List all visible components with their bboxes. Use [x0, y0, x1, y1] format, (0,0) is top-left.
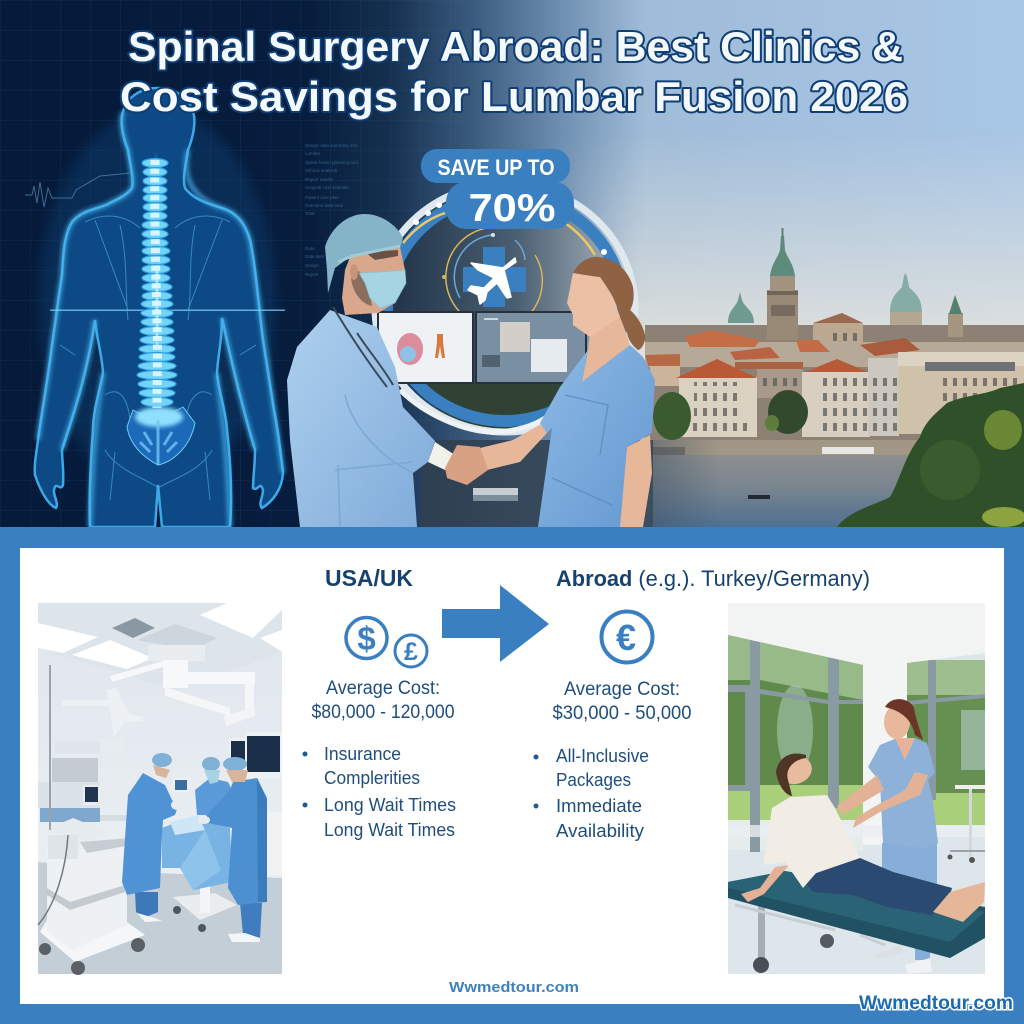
face and neck [342, 247, 405, 315]
usa bullet list: Insurance [324, 744, 401, 764]
abroad bullet list: Packages [556, 770, 631, 790]
handshake [445, 445, 488, 485]
technical data text: Data item [305, 254, 325, 259]
usa bullet list: Complerities [324, 768, 420, 788]
blue x-ray body [35, 88, 285, 527]
windows right [907, 660, 985, 825]
technical data text: Lumbar [305, 151, 321, 156]
surgeon [287, 214, 455, 527]
face [567, 273, 620, 337]
building 1 [676, 359, 757, 437]
usa cost: Average Cost: [326, 678, 440, 699]
neck [582, 315, 630, 382]
scrub top [538, 345, 655, 527]
technical data text: Design data summary info [305, 143, 358, 148]
technical data text: Clinical analysis [305, 168, 338, 173]
technical data text: Patient care plan [305, 195, 339, 200]
tour boat [473, 488, 518, 501]
cuff [428, 442, 455, 470]
column [863, 645, 907, 845]
technical data text: Total [305, 211, 315, 216]
glow line [50, 310, 285, 311]
embankment [653, 440, 923, 459]
clock tower [767, 228, 798, 340]
abroad cost: Average Cost: [564, 679, 680, 700]
gown [287, 310, 435, 527]
ring lower highlight [400, 390, 545, 432]
panel footer logo: Wwmedtour.com [449, 979, 579, 996]
vent [112, 618, 155, 638]
patient [741, 752, 985, 922]
ceiling [728, 603, 985, 665]
left equipment [38, 665, 130, 830]
tree foreground [837, 383, 1024, 527]
circular savings ring [375, 184, 635, 432]
stethoscope [333, 307, 393, 387]
icon: euro coin [602, 612, 652, 662]
hero background [0, 0, 1024, 527]
surgeon left [122, 753, 183, 922]
therapist [837, 699, 938, 848]
church front [813, 313, 863, 345]
technical data text: Report [305, 272, 319, 277]
hair [573, 257, 645, 350]
technical data text: Spinal fusion planning and [305, 160, 358, 165]
right arm [618, 435, 652, 527]
right dome [890, 273, 963, 337]
usa cost [312, 678, 454, 723]
abroad bullet list: All-Inclusive [556, 746, 649, 766]
waterfront trees [653, 390, 808, 440]
building 2 [802, 359, 870, 437]
building 3 [868, 358, 899, 436]
stand cart [948, 785, 985, 863]
operating room photo [38, 603, 282, 975]
rehabilitation room photo [728, 603, 985, 974]
save up to badge: 70% [468, 187, 556, 230]
icon: euro coin: € [616, 617, 636, 658]
surgical mask [359, 270, 406, 308]
surgeon middle [195, 757, 237, 820]
usa bullet list: Long Wait Times [324, 795, 456, 815]
plane and cross emblem [442, 228, 542, 320]
river [420, 440, 1024, 527]
icon: dollar coin: $ [357, 620, 376, 657]
icon: pound coin [395, 635, 427, 667]
window frames left [728, 640, 863, 852]
left dome [728, 292, 754, 323]
shoulder blades and bones [60, 216, 256, 500]
usa bullet list [302, 744, 456, 840]
save up to badge [421, 149, 574, 230]
ceiling mount and arms [55, 624, 255, 755]
surgeon right [198, 757, 267, 942]
abroad cost [552, 679, 692, 724]
monitors [378, 312, 586, 383]
column heading: USA/UK: USA/UK [325, 565, 413, 591]
nurse [480, 257, 655, 527]
small monitor and right monitors [173, 732, 282, 875]
city skyline [645, 228, 1024, 459]
therapist legs [873, 843, 937, 974]
sacrum [127, 407, 195, 465]
wall and ceiling [38, 603, 282, 974]
treatment table [728, 871, 985, 973]
title: Spinal Surgery Abroad: Best Clinics & [128, 23, 903, 70]
column heading: abroad: Abroad (e.g.). Turkey/Germany) [556, 566, 870, 591]
pulse line [25, 173, 130, 207]
technical data text: Surgical cost estimate [305, 185, 350, 190]
trees inside ring [415, 383, 575, 428]
building beside 1 [735, 362, 803, 398]
technical data text: Outcome data total [305, 203, 343, 208]
usa cost: $80,000 - 120,000 [312, 702, 454, 723]
usa bullet list: Long Wait Times [324, 820, 455, 840]
title [120, 23, 908, 120]
abroad bullet list: Availability [556, 821, 644, 841]
abroad bullet list [534, 746, 649, 841]
technical data text [305, 143, 358, 277]
technical data text: Data [305, 246, 315, 251]
abroad bullet list: Immediate [556, 796, 642, 816]
surgical table [162, 815, 237, 932]
left forearm [480, 423, 547, 470]
instrument cart [38, 818, 145, 975]
technical data text: Design [305, 263, 320, 268]
corner watermark logo: Wwmedtour.com [859, 993, 1013, 1014]
comparison frame [0, 527, 1024, 1024]
rowing boat [748, 495, 770, 499]
spine [127, 158, 195, 465]
technical data text: Report results [305, 177, 334, 182]
arrow [442, 585, 549, 662]
windows left [728, 635, 863, 850]
ceiling lights [38, 603, 282, 669]
abroad cost: $30,000 - 50,000 [552, 703, 692, 724]
save up to badge: SAVE UP TO [438, 155, 554, 180]
surgical cap [325, 214, 403, 293]
middle rows of roofs [645, 330, 1024, 386]
building 4 [898, 352, 1024, 434]
title: Cost Savings for Lumbar Fusion 2026 [120, 73, 908, 120]
icon: dollar coin [346, 618, 387, 658]
icon: pound coin: £ [404, 638, 418, 666]
